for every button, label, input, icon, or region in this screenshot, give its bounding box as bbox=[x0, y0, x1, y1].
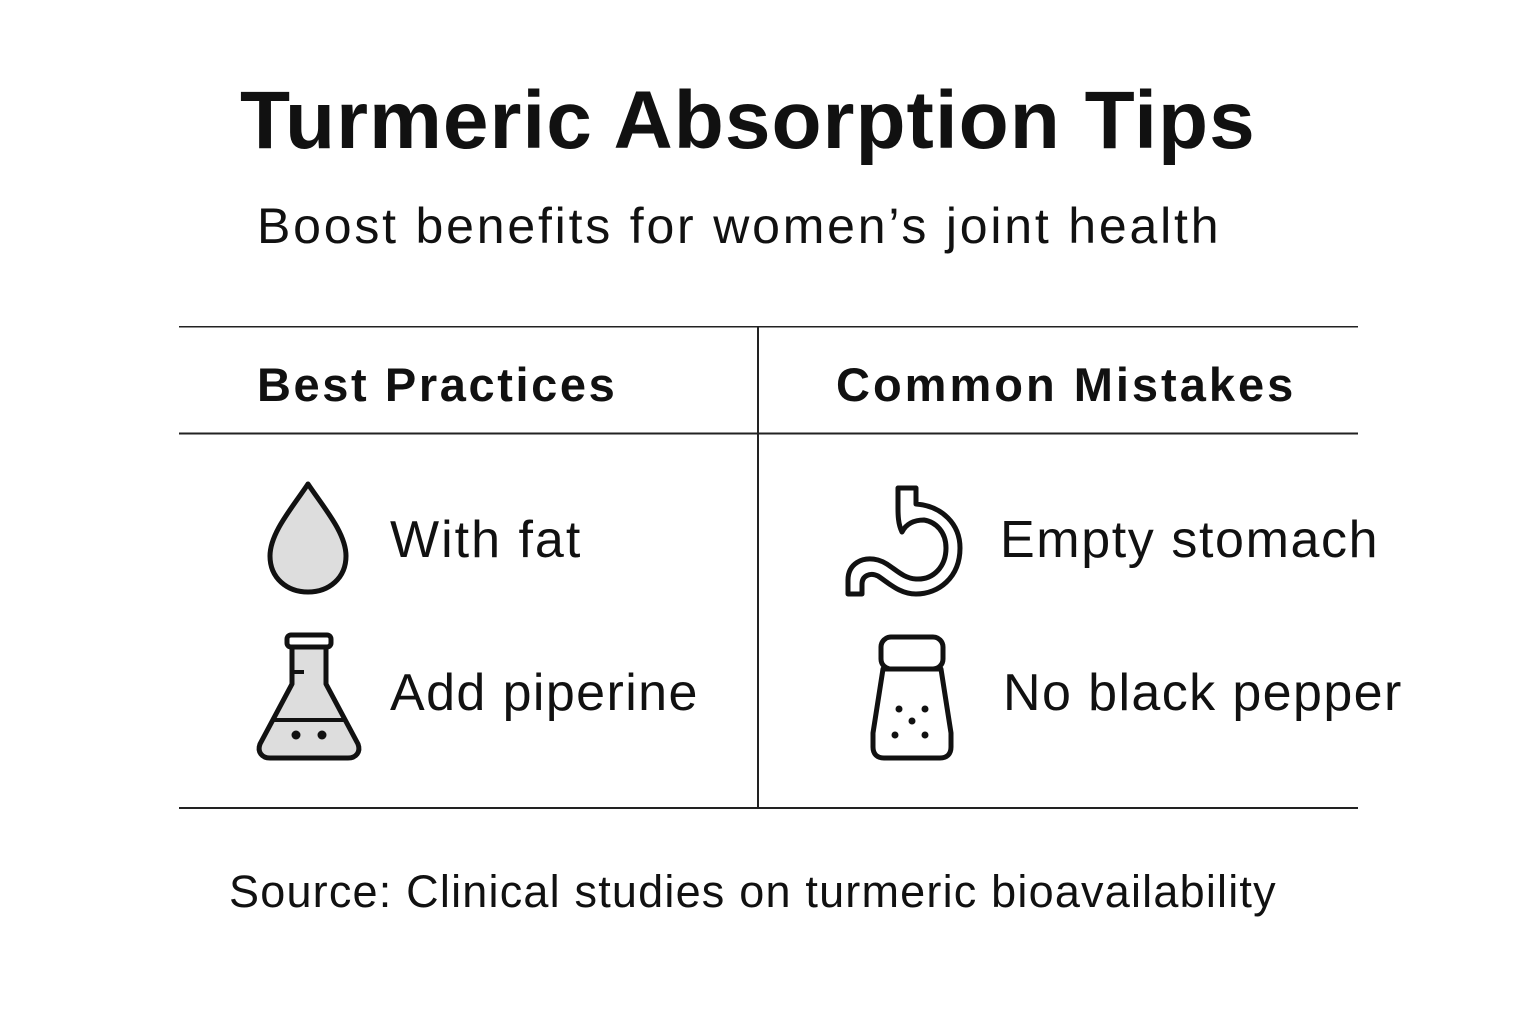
header: common mistakes: Common Mistakes bbox=[836, 358, 1296, 411]
table bbox=[179, 326, 1358, 809]
source note: Source: Clinical studies on turmeric bioavailability bbox=[229, 866, 1277, 917]
icon: shaker bbox=[870, 634, 954, 760]
title: Turmeric Absorption Tips bbox=[240, 75, 1256, 166]
text: with fat: With fat bbox=[390, 511, 582, 569]
text: no black pepper: No black pepper bbox=[1003, 664, 1403, 722]
subtitle: Boost benefits for women’s joint health bbox=[257, 198, 1221, 254]
icon: flask bbox=[256, 632, 362, 760]
icon: stomach bbox=[846, 486, 962, 596]
header: best practices: Best Practices bbox=[257, 358, 617, 411]
text: add piperine: Add piperine bbox=[390, 664, 699, 722]
text: empty stomach: Empty stomach bbox=[1000, 511, 1379, 569]
icon: drop bbox=[268, 482, 348, 594]
